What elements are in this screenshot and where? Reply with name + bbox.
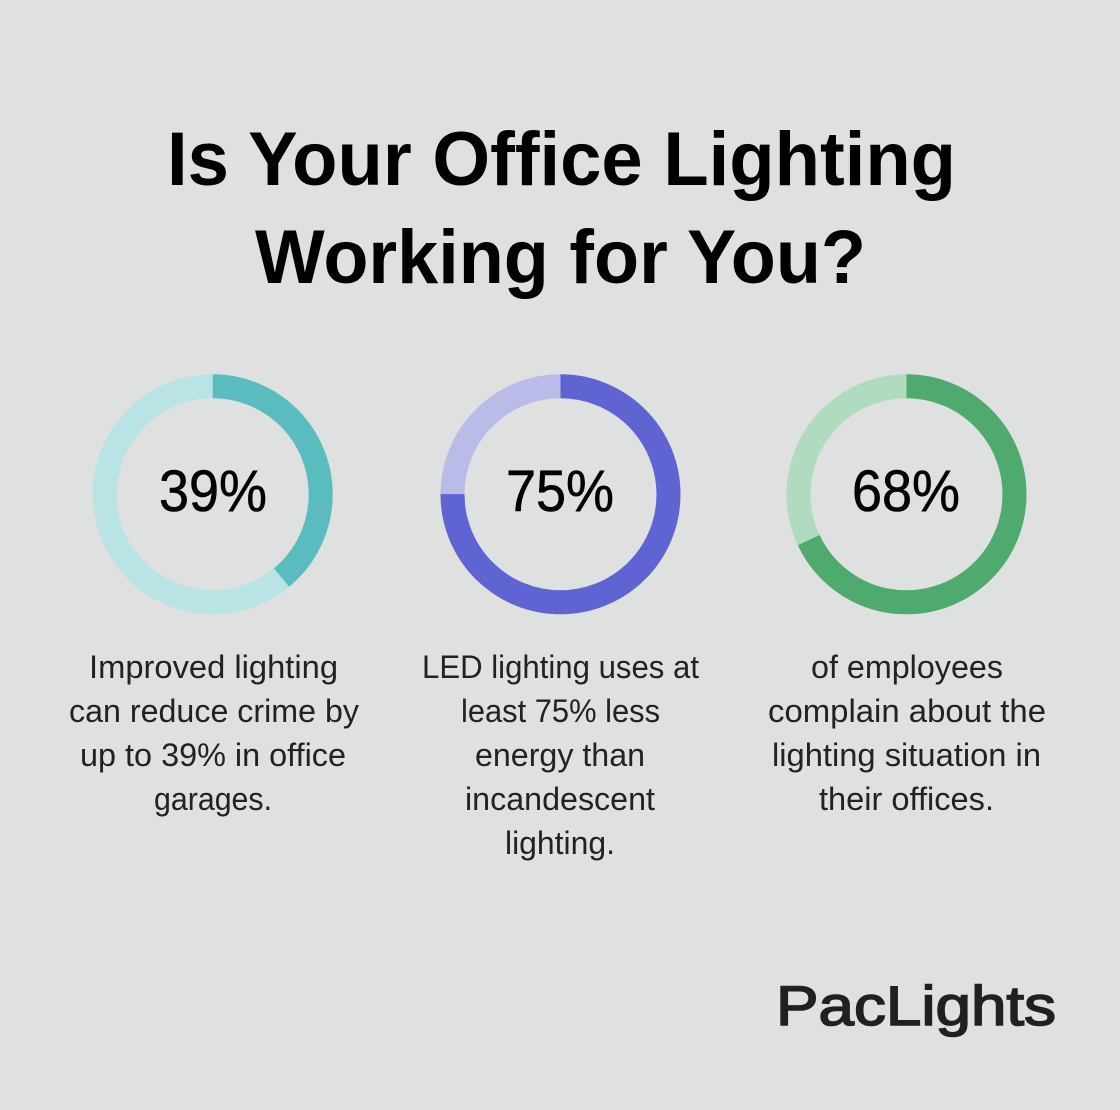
caption: employee complaints xyxy=(768,649,1046,817)
caption: employee complaints: complain about the xyxy=(768,693,1046,729)
caption: employee complaints: their offices. xyxy=(819,781,994,817)
caption: crime reduction: Improved lighting xyxy=(89,649,338,685)
panel: employee complaints stat xyxy=(768,386,1046,817)
caption: employee complaints: lighting situation in xyxy=(772,737,1041,773)
caption: crime reduction: can reduce crime by xyxy=(69,693,359,729)
caption: LED energy: energy than xyxy=(475,737,645,773)
donut chart: 39%: 39% xyxy=(159,459,267,524)
caption: LED energy: incandescent xyxy=(465,781,655,817)
caption: crime reduction xyxy=(69,649,359,817)
caption: crime reduction: garages. xyxy=(154,781,272,817)
donut chart: 39% xyxy=(105,386,321,602)
donut chart: 68% xyxy=(798,386,1014,602)
title xyxy=(167,117,956,300)
donut chart: 75%: 75% xyxy=(506,459,614,524)
caption: LED energy: lighting. xyxy=(505,825,615,861)
logo: PacLights: PacLights xyxy=(776,974,1056,1037)
title: Working for You? xyxy=(255,215,866,300)
caption: LED energy: LED lighting uses at xyxy=(422,649,699,685)
caption: LED energy: least 75% less xyxy=(461,693,660,729)
caption: employee complaints: of employees xyxy=(811,649,1003,685)
caption: crime reduction: up to 39% in office xyxy=(80,737,346,773)
panel: LED energy stat xyxy=(422,386,699,861)
donut chart: 75% xyxy=(452,386,668,602)
title: Is Your Office Lighting xyxy=(167,117,956,202)
caption: LED energy xyxy=(422,649,699,861)
donut chart: 68%: 68% xyxy=(852,459,960,524)
panel: crime reduction stat xyxy=(69,386,359,817)
